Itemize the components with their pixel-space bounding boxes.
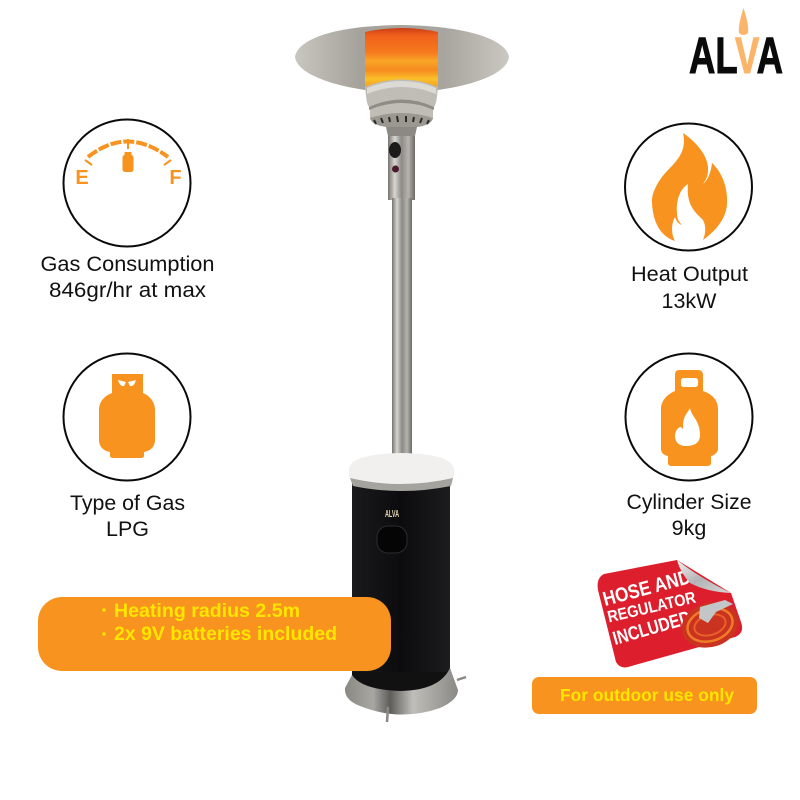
feature: gas consumption — [40, 120, 214, 302]
callout: heating radius and batteries — [38, 597, 391, 671]
product photo: patio heater — [295, 25, 509, 722]
heater pole — [392, 198, 412, 463]
heater vents — [374, 116, 429, 124]
value: cylinder size: 9kg — [672, 516, 706, 540]
feature: type of gas — [64, 354, 190, 541]
value: type of gas: LPG — [106, 517, 149, 541]
icon: fuel gauge: F — [169, 167, 182, 189]
icon: flame — [625, 124, 752, 250]
logo: ALVA — [689, 8, 783, 84]
heater white top cap — [349, 453, 454, 487]
icon: gas bottle — [64, 354, 190, 480]
sticker: hose and regulator included — [598, 560, 744, 667]
heater foot bolts — [387, 677, 466, 722]
label: type of gas: Type of Gas — [70, 491, 185, 515]
sticker red background — [598, 560, 742, 667]
icon: fuel gauge: E — [75, 167, 89, 189]
icon: fuel gauge — [64, 120, 190, 246]
sticker text: INCLUDED — [611, 608, 693, 650]
sticker text — [601, 566, 698, 650]
heater control knob — [389, 142, 401, 158]
icon: cylinder with flame — [626, 354, 752, 480]
sticker text: HOSE AND — [601, 566, 693, 611]
callout bullet 2 — [102, 632, 106, 636]
callout: for outdoor use only — [532, 677, 757, 714]
sticker hose coil image — [676, 595, 744, 655]
feature: heat output — [625, 124, 752, 313]
sticker peeled corner — [677, 560, 731, 593]
heater emitter — [365, 28, 438, 88]
base logo: ALVA — [385, 509, 399, 520]
logo flame — [739, 8, 748, 35]
callout line: batteries: 2x 9V batteries included — [114, 623, 337, 645]
heater base body — [352, 483, 450, 688]
label: heat output: Heat Output — [631, 262, 748, 286]
heater steel foot ring — [345, 668, 458, 715]
feature: cylinder size — [626, 354, 752, 540]
sticker text: REGULATOR — [606, 589, 698, 626]
label: gas consumption: Gas Consumption — [40, 252, 214, 276]
heater burner housing — [365, 80, 438, 128]
heater reflector dish — [295, 25, 509, 90]
callout bullet 1 — [102, 608, 106, 612]
value: heat output: 13kW — [662, 289, 717, 313]
heater ignition button — [392, 166, 399, 172]
base window — [377, 526, 407, 553]
label: cylinder size: Cylinder Size — [626, 490, 752, 514]
callout: for outdoor use only: For outdoor use only — [560, 685, 734, 705]
value: gas consumption: 846gr/hr at max — [49, 278, 206, 302]
logo wordmark: ALVA — [689, 27, 783, 84]
heater control column — [388, 133, 415, 200]
callout line: heating radius: Heating radius 2.5m — [114, 600, 300, 622]
